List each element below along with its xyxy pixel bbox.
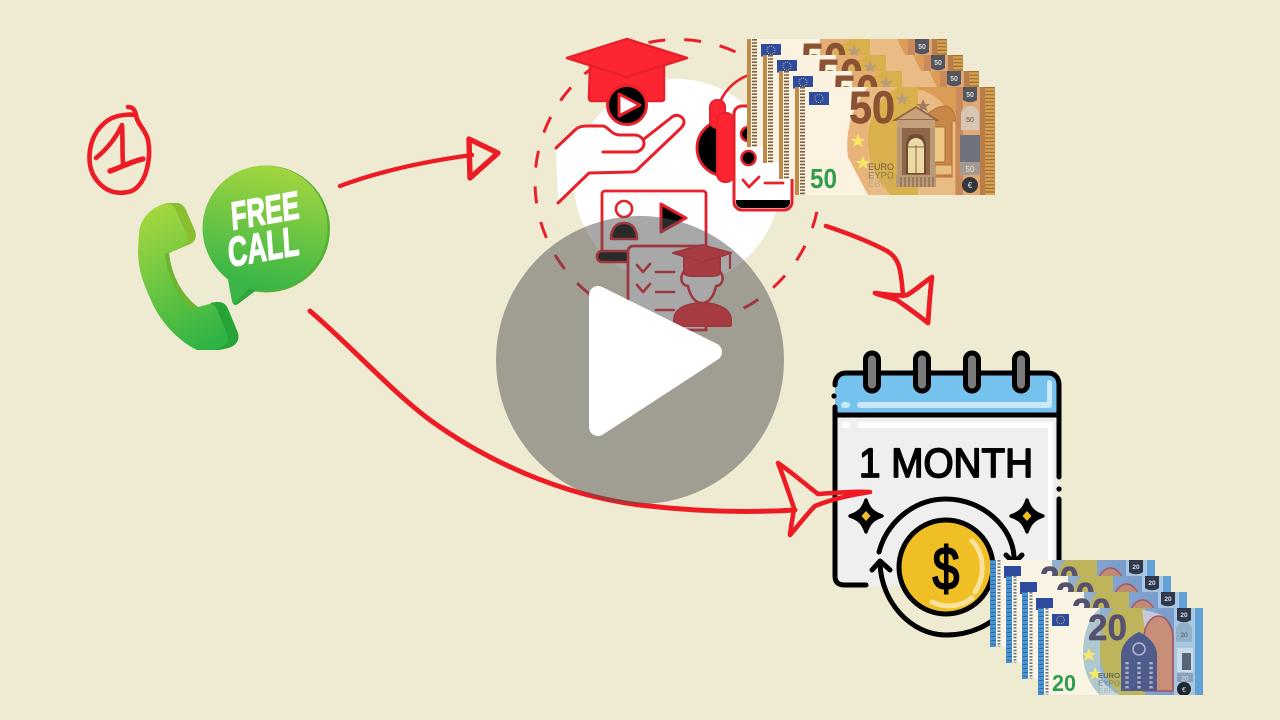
banknote: 20 euro back 1 bbox=[1022, 591, 1187, 679]
banknote: 50 euro front: EURO bbox=[868, 162, 894, 172]
banknote: 20 euro front: 20 bbox=[1052, 670, 1076, 696]
banknote: 50 euro front: 50 bbox=[966, 92, 974, 99]
banknote: 20 euro front: ΕΒΡΩ bbox=[1098, 686, 1120, 695]
banknote: 50 euro front: ΕΥΡΩ bbox=[868, 170, 894, 180]
banknote: 20 euro front: 20 bbox=[1181, 676, 1189, 682]
banknote: 20 euro back 3 bbox=[990, 559, 1155, 647]
banknote: 50 euro front: 50 bbox=[966, 165, 975, 174]
calendar binder rings bbox=[866, 353, 1028, 391]
banknote: 50 euro back 3: 50 bbox=[918, 44, 926, 51]
banknote: 50 euro back 1 bbox=[779, 66, 979, 179]
banknote: 20 euro front: 20 bbox=[1088, 607, 1127, 648]
sparkle right bbox=[1011, 500, 1043, 532]
banknote: 20 euro front: EURO bbox=[1098, 671, 1120, 680]
banknote: 50 euro back 2: 50 bbox=[817, 50, 863, 101]
icon: headset and phone bbox=[697, 74, 792, 210]
video play overlay bbox=[496, 216, 784, 504]
icon: stack of 20 euro notes bbox=[990, 559, 1203, 696]
icon: video lesson screen bbox=[597, 191, 709, 262]
icon: hand-drawn number one in circle bbox=[89, 107, 149, 193]
banknote: 50 euro back 2: 50 bbox=[934, 60, 942, 67]
banknote: 20 euro back 1: 20 bbox=[1072, 591, 1111, 632]
icon: calendar bbox=[831, 353, 1062, 635]
circular arrows bbox=[872, 499, 1022, 635]
banknote: 20 euro back 1: 20 bbox=[1164, 596, 1172, 603]
icon: green telephone handset bbox=[138, 203, 239, 350]
banknote: 20 euro back 3: 20 bbox=[1132, 564, 1140, 571]
banknote: 50 euro front: 50 bbox=[849, 82, 895, 133]
banknote: 20 euro front: ΕΥΡΩ bbox=[1098, 678, 1120, 688]
banknote: 50 euro front: € bbox=[968, 181, 973, 190]
sparkle left bbox=[850, 500, 882, 532]
icon: graduation cap and video on hand bbox=[556, 39, 687, 203]
call text: CALL bbox=[226, 217, 301, 276]
icon: free call speech bubble bbox=[202, 166, 330, 305]
dollar sign: $ bbox=[933, 535, 959, 602]
banknote: 50 euro front: ΕΒΡΩ bbox=[868, 179, 894, 189]
icon: stack of 50 euro notes bbox=[747, 34, 995, 195]
banknote: 20 euro back 2: 20 bbox=[1148, 580, 1156, 587]
banknote: 50 euro front bbox=[795, 82, 995, 195]
banknote: 50 euro back 3: 50 bbox=[801, 34, 847, 85]
banknote: 50 euro back 3 bbox=[747, 34, 947, 147]
dashed ring bbox=[535, 40, 820, 324]
arrow: phone to course bbox=[340, 139, 498, 186]
banknote: 50 euro front: 50 bbox=[810, 163, 837, 194]
banknote: 20 euro front bbox=[1038, 607, 1203, 696]
banknote: 20 euro front: 20 bbox=[1180, 612, 1188, 619]
banknote: 20 euro back 2: 20 bbox=[1056, 575, 1095, 616]
arrow: phone to calendar bbox=[310, 311, 870, 535]
banknote: 50 euro back 2 bbox=[763, 50, 963, 163]
white background circle bbox=[574, 79, 780, 285]
free text: FREE bbox=[230, 184, 301, 239]
banknote: 20 euro back 2 bbox=[1006, 575, 1171, 663]
arrow: course to calendar bbox=[826, 226, 932, 323]
banknote: 20 euro front: 20 bbox=[1180, 632, 1188, 639]
banknote: 20 euro back 3: 20 bbox=[1040, 559, 1079, 600]
calendar label: 1 MONTH bbox=[859, 440, 1033, 486]
banknote: 50 euro front: 50 bbox=[966, 117, 974, 124]
banknote: 50 euro back 1: 50 bbox=[833, 66, 879, 117]
banknote: 50 euro back 1: 50 bbox=[950, 76, 958, 83]
coin bbox=[899, 520, 993, 614]
icon: checklist and graduate bbox=[628, 245, 731, 330]
banknote: 20 euro front: € bbox=[1182, 687, 1186, 694]
